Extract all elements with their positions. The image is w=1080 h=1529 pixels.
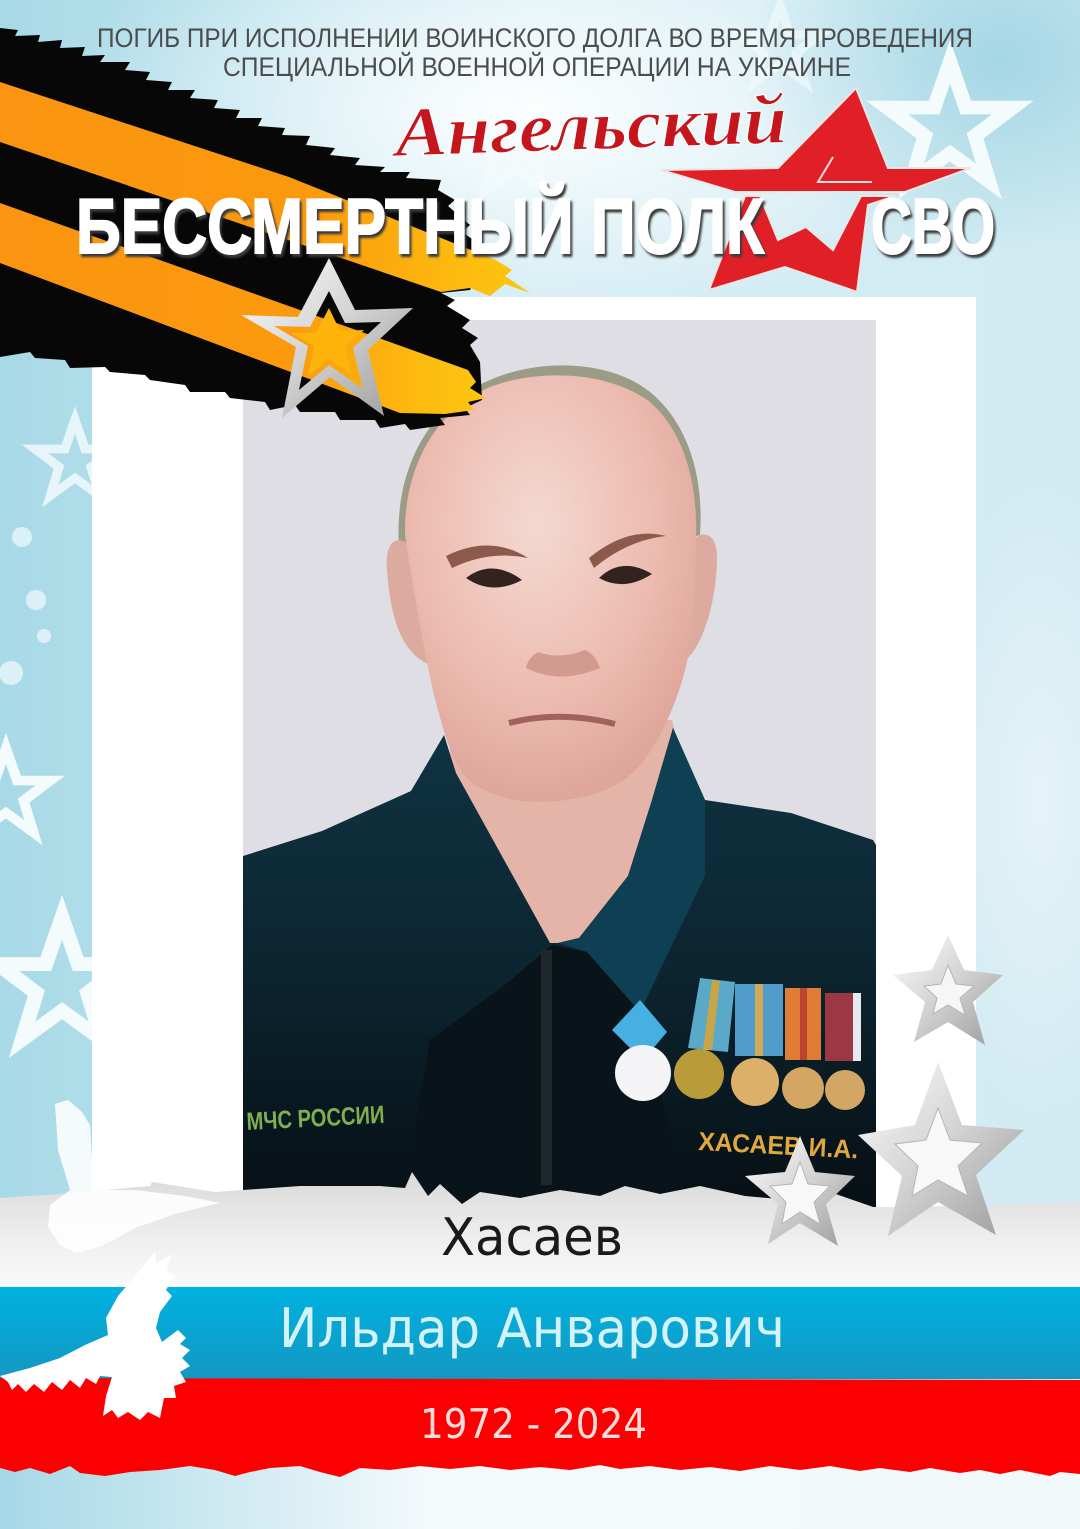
hair <box>398 365 701 560</box>
white photo panel <box>92 297 976 1207</box>
red band <box>0 1378 1080 1477</box>
main title: СВО <box>871 182 995 270</box>
icon: dove on band <box>0 1252 190 1420</box>
top caption: СПЕЦИАЛЬНОЙ ВОЕННОЙ ОПЕРАЦИИ НА УКРАИНЕ <box>223 51 851 82</box>
blue band <box>0 1287 1080 1379</box>
bubbles <box>0 527 51 685</box>
surname: Хасаев <box>441 1208 623 1268</box>
icon: red army star <box>661 88 971 292</box>
medals <box>615 1045 865 1110</box>
MCHS patch: МЧС РОССИИ <box>246 1101 385 1136</box>
collar <box>558 728 705 1012</box>
head <box>405 375 696 802</box>
torn white strip <box>0 1172 1080 1290</box>
mouth <box>509 717 615 724</box>
brows <box>446 534 666 568</box>
silver stars <box>745 935 1024 1246</box>
top caption <box>97 23 973 82</box>
heading: region script: Ангельский <box>389 81 788 172</box>
main title: БЕССМЕРТНЫЙ ПОЛК <box>76 182 764 270</box>
top caption: ПОГИБ ПРИ ИСПОЛНЕНИИ ВОИНСКОГО ДОЛГА ВО ВРЕМЯ ПРОВЕДЕНИЯ <box>97 23 973 53</box>
icon: faint dove <box>48 1100 220 1253</box>
icon: silver star on ribbon <box>241 258 413 418</box>
decorative background stars <box>0 0 1034 1058</box>
nose <box>526 650 600 676</box>
name patch: ХАСАЕВ И.А. <box>698 1126 859 1164</box>
years: 1972 - 2024 <box>420 1400 647 1448</box>
given name: Ильдар Анварович <box>279 1297 785 1360</box>
ribbon bars <box>612 978 861 1061</box>
zipper <box>541 950 552 1185</box>
georgian ribbon <box>0 28 530 430</box>
shirt placket <box>400 945 690 1207</box>
portrait photo <box>243 320 876 1207</box>
ears <box>387 534 717 664</box>
eyes <box>466 566 652 588</box>
